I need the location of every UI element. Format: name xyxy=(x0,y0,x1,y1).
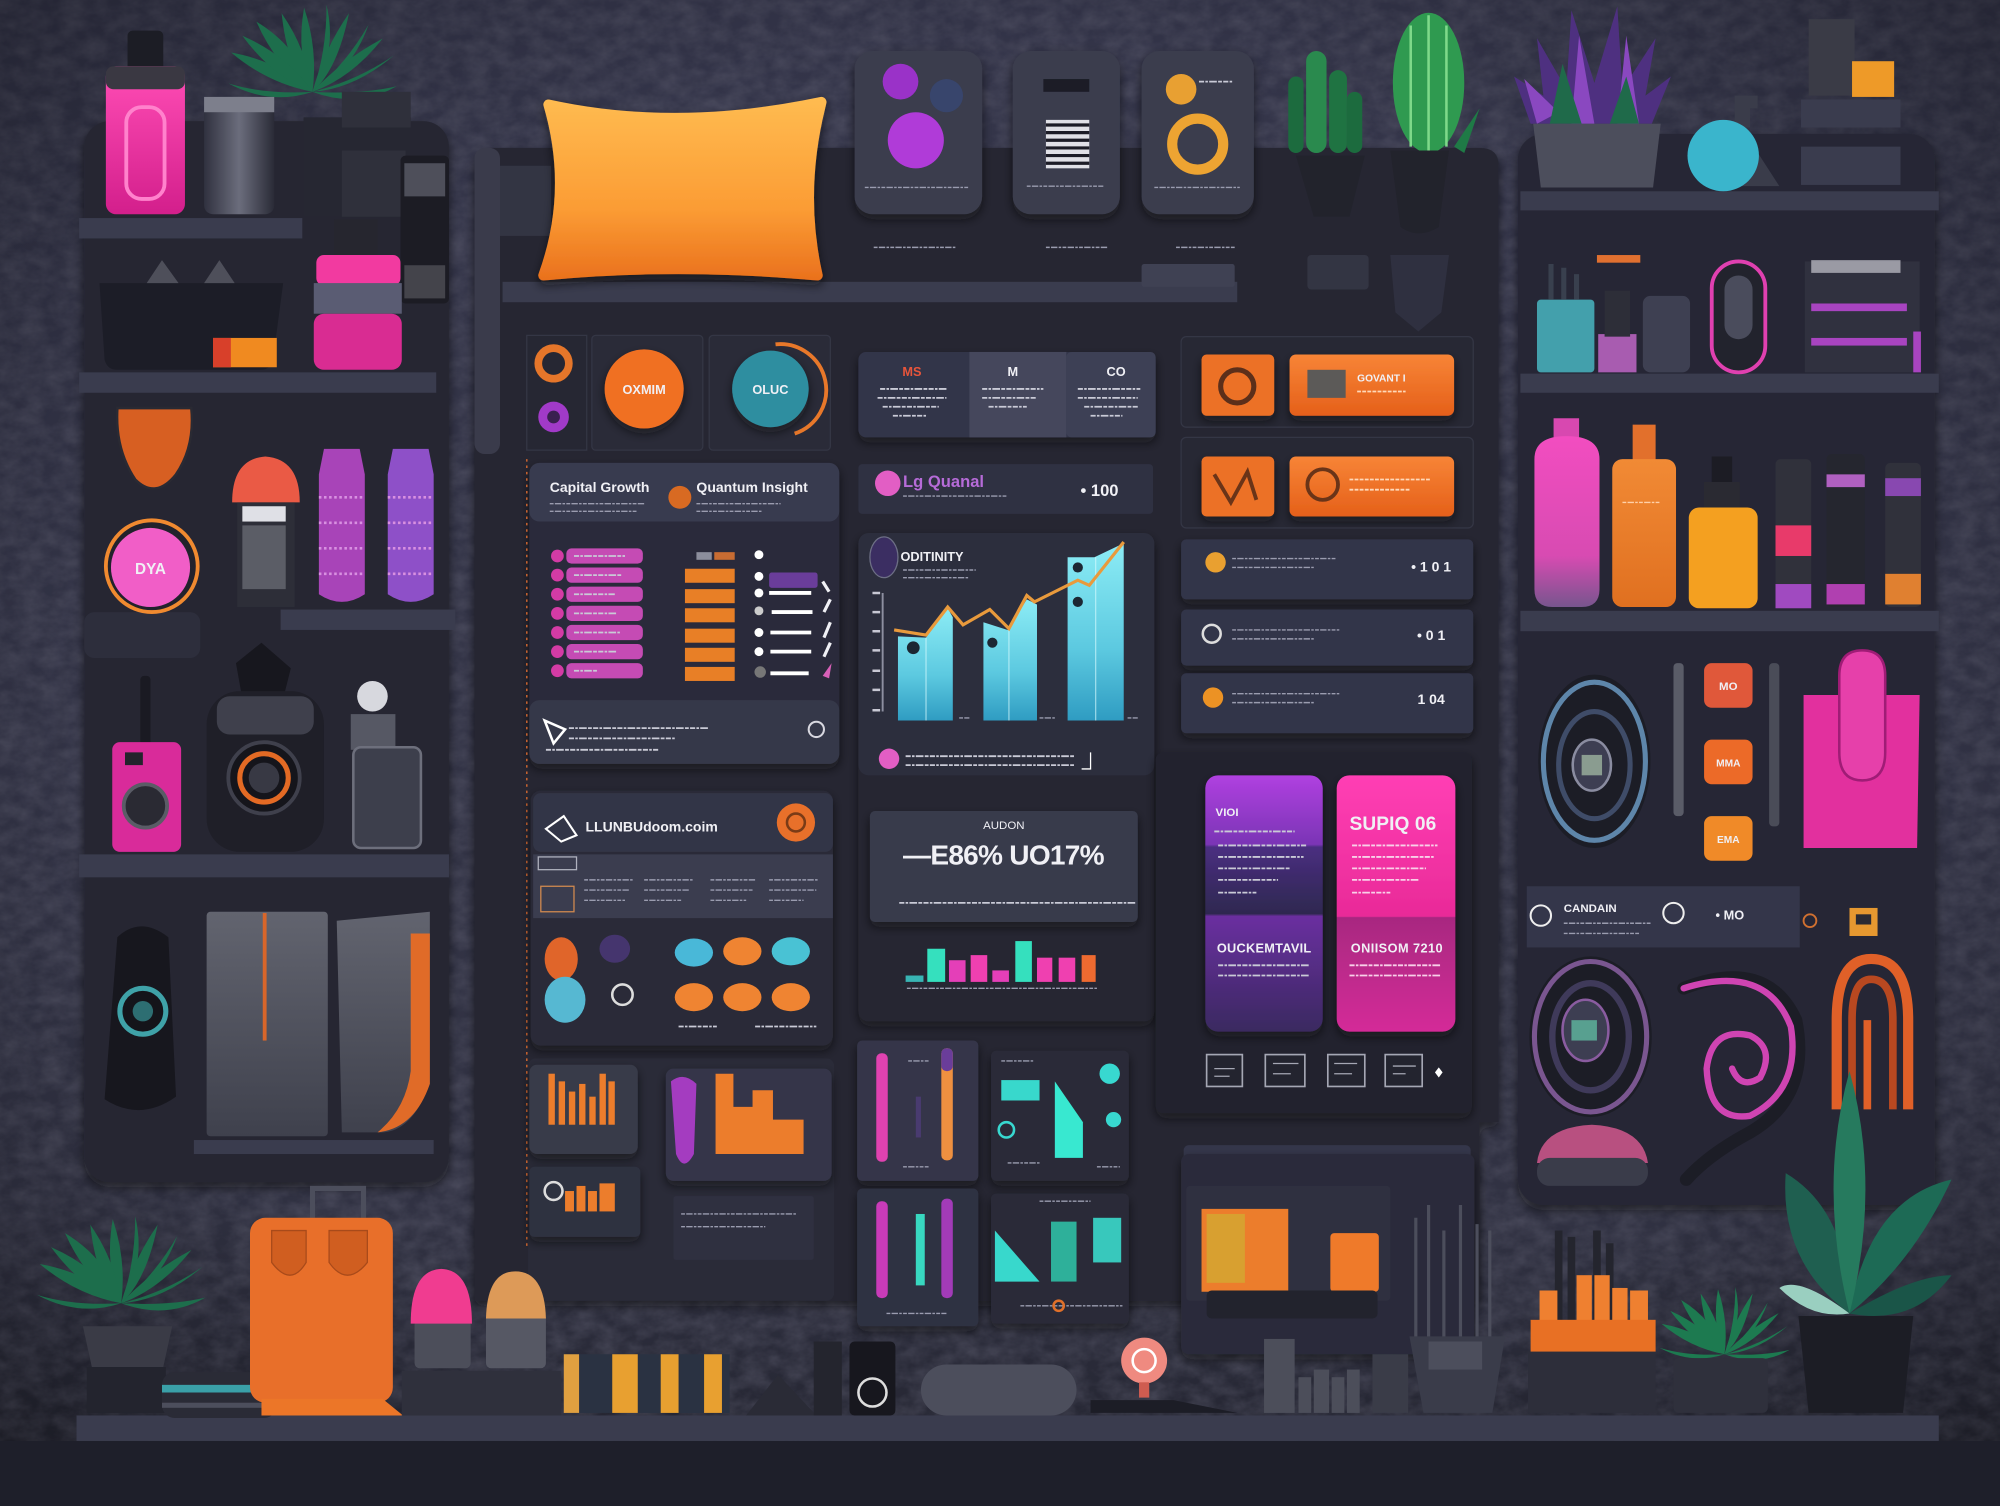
note: small text block xyxy=(673,1196,814,1260)
list: white marks xyxy=(754,550,832,678)
icon: orange shield xyxy=(117,408,192,489)
icon: purple swirl xyxy=(1529,956,1652,1117)
icon: orange bottle xyxy=(1612,425,1676,607)
icon: orange dome jar xyxy=(402,1271,561,1415)
panel: stats columns: M xyxy=(1007,364,1018,379)
panel: service lists xyxy=(529,463,839,764)
icon: orange pillow xyxy=(543,102,821,275)
icon: stacked boxes and tall bottle xyxy=(304,92,449,303)
plant: small leafy pot xyxy=(1659,1287,1790,1413)
panel: title strip xyxy=(858,464,1153,514)
icon: camera backpack xyxy=(207,643,324,852)
icon: pink camera xyxy=(112,676,181,852)
button: teal round: OLUC xyxy=(752,382,788,397)
panel: info strip: • MO xyxy=(1716,907,1744,922)
icon: pink layered jar xyxy=(314,219,402,370)
panel: stats columns: MS xyxy=(902,364,922,379)
plant: large leafy plant xyxy=(1779,1071,1952,1413)
icon: dark bowl with orange swatch xyxy=(99,260,283,370)
card: pink xyxy=(1337,775,1455,1032)
icons: small coloured buttons: MMA xyxy=(1716,758,1741,769)
icon: pink gradient bottle xyxy=(1534,418,1599,607)
icon: pink oval device xyxy=(1712,261,1765,372)
panel: data rows: • 1 0 1 xyxy=(1411,558,1451,574)
chart: cyan area growth chart xyxy=(858,533,1154,1021)
icon: orange swirl xyxy=(538,348,569,379)
icon: grey bottle xyxy=(351,681,421,848)
card: orange ring card xyxy=(1142,51,1254,214)
note: footer text xyxy=(545,720,824,750)
plant: large cactus xyxy=(1390,13,1480,233)
card: pink: SUPIQ 06 xyxy=(1349,814,1436,835)
panel: title strip: Lg Quanal xyxy=(903,472,984,491)
card: pink: ONIISOM 7210 xyxy=(1351,941,1443,956)
panel: teal shapes bottom xyxy=(991,1194,1129,1324)
icon: pink disc: DYA xyxy=(135,561,166,578)
shelf: bottom counter xyxy=(0,1415,2000,1506)
list: orange bars xyxy=(685,551,735,681)
icon: denim bag with orange xyxy=(337,912,430,1132)
icon: orange arch xyxy=(1837,959,1908,1109)
chart: orange column block xyxy=(529,1065,638,1154)
icons: cups and bottles on shelf xyxy=(1537,255,1690,372)
chart: cyan area growth chart: ODITINITY xyxy=(901,549,964,564)
panel: left shelf board xyxy=(79,121,455,1182)
panel: headline stat: AUDON xyxy=(983,820,1025,832)
icon: grey pill xyxy=(921,1364,1077,1415)
icons: colourful blobs xyxy=(545,935,816,1027)
icon: pink bottle xyxy=(106,31,185,214)
icons: small coloured buttons xyxy=(1704,663,1753,861)
panel: headline stat: —E86% UO17% xyxy=(903,840,1105,871)
card: purple xyxy=(1205,775,1323,1032)
icon: wall holder box xyxy=(1307,255,1449,332)
icons: slim tubes xyxy=(1776,454,1921,608)
panel: data rows xyxy=(1181,539,1473,733)
panel: icon grid: LLUNBUdoom.coim xyxy=(585,818,718,834)
icon: teal disks xyxy=(162,1372,277,1418)
panel: orange action rows xyxy=(1181,337,1473,528)
icon: pink dome jar xyxy=(411,1269,472,1368)
icon: grey small jars xyxy=(1264,1339,1408,1413)
chart: purple tag and orange skyline xyxy=(666,1069,832,1181)
panel: info strip xyxy=(1527,886,1878,947)
plant: small cactus xyxy=(1288,51,1365,217)
panel: stats columns xyxy=(858,352,1156,437)
panel: lower left widgets base xyxy=(527,459,834,1301)
card: purple: OUCKEMTAVIL xyxy=(1217,941,1311,956)
icon: amber bottle xyxy=(1689,457,1758,608)
panel: headline stat xyxy=(870,811,1138,922)
icon: pink tote bag xyxy=(1804,650,1920,848)
icon: slim vertical bars xyxy=(1673,663,1779,826)
plant: left fern xyxy=(37,1216,205,1413)
panel: info strip: CANDAIN xyxy=(1564,903,1617,915)
icon: striped roll xyxy=(564,1354,730,1413)
note: chart caption xyxy=(879,749,1091,769)
button: teal round xyxy=(732,344,826,434)
panel: icon grid xyxy=(531,791,833,1046)
icon: purple badge xyxy=(538,402,569,432)
icon: teal ball xyxy=(1688,96,1779,191)
icon: purple bottles xyxy=(319,449,434,602)
panel: pricing cards xyxy=(1156,752,1472,1113)
icon: grey jar xyxy=(204,97,274,214)
panel: stats columns: CO xyxy=(1107,364,1126,379)
icon: pink spiral xyxy=(1684,978,1799,1180)
icon: orange stick box xyxy=(1528,1231,1656,1413)
panel: stacked folders xyxy=(1181,1145,1474,1354)
panel: status icon cells xyxy=(527,335,830,450)
icon: red capped jar xyxy=(232,457,300,607)
panel: title strip: • 100 xyxy=(1080,481,1119,500)
panel: right shelf board xyxy=(1518,134,1939,1205)
button: orange round xyxy=(605,349,684,428)
list: pink bars xyxy=(551,548,643,678)
plant: top left fern xyxy=(228,5,397,99)
icon: stacked dark boxes xyxy=(1801,19,1901,185)
icon: black device with teal ring xyxy=(105,926,176,1110)
icon: striped rack xyxy=(1805,260,1921,372)
button: orange round: OXMIM xyxy=(623,382,666,397)
icon: pink lamp xyxy=(1091,1338,1237,1413)
panel: main board xyxy=(474,148,1499,1301)
card: purple: VIOI xyxy=(1216,807,1239,819)
icons: small coloured buttons: EMA xyxy=(1717,835,1740,846)
panel: teal shapes top xyxy=(991,1051,1129,1181)
panel: slider widget top xyxy=(857,1041,978,1181)
panel: service lists: Capital Growth xyxy=(550,479,649,495)
plant: purple lavender xyxy=(1514,6,1671,187)
panel: service lists: Quantum Insight xyxy=(696,479,808,495)
icon: pink cushion xyxy=(1537,1125,1648,1186)
chart: mini bars xyxy=(906,941,1097,988)
icon: brush cup xyxy=(1409,1205,1505,1413)
icon: denim panel xyxy=(207,912,328,1136)
chart: small orange block xyxy=(529,1167,640,1237)
icon: small camera cluster xyxy=(746,1342,895,1415)
panel: orange action rows: GOVANT I xyxy=(1357,373,1406,384)
card: striped list card xyxy=(1013,51,1120,214)
panel: slider widget bottom xyxy=(857,1188,978,1326)
panel: data rows: • 0 1 xyxy=(1417,627,1445,643)
icon: pink disc xyxy=(106,520,198,612)
card: purple swirl card xyxy=(855,51,982,214)
icon: orange suitcase xyxy=(250,1188,403,1415)
caption row below cards xyxy=(874,246,1235,248)
icons: small square tiles xyxy=(1207,1055,1443,1086)
icon: blue swirl xyxy=(1538,675,1651,848)
icons: small coloured buttons: MO xyxy=(1719,681,1738,693)
panel: data rows: 1 04 xyxy=(1417,691,1445,707)
